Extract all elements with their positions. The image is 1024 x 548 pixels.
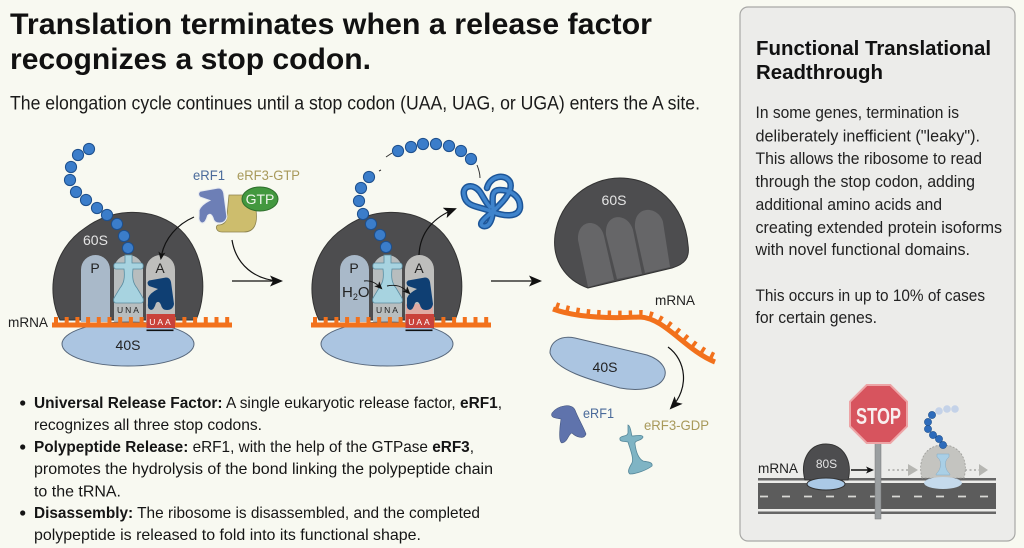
eRF3-GTP complex: GTP [246,191,274,207]
60S subunit [53,212,203,320]
sidebar statistic: This occurs in up to 10% of cases [756,287,985,305]
80S ribosome [804,444,849,490]
sidebar heading: Functional Translational [756,38,991,60]
panel: step 3 disassembly [550,178,717,474]
bullet: polypeptide release: Polypeptide Release: eRF1, with the help of the GTPase eRF3, [34,439,474,456]
eRF1 factor [193,167,227,223]
sidebar description: creating extended protein isoforms [756,219,1002,237]
panel: step 2 polypeptide release [311,138,520,366]
bullet: polypeptide release [20,439,493,500]
panel: step 1 release factor enters A site [8,143,300,366]
arrow: factors leaving [668,347,683,408]
40S subunit separated: 40S [593,359,617,375]
bullet list [20,395,502,544]
bullet: universal release factor: recognizes all three stop codons. [34,417,262,434]
sidebar statistic [756,287,985,327]
ribosome middle site with tRNA: UNA [117,305,141,315]
ribosome site A with eRF1 [146,255,175,322]
UAA stop codon: UAA [408,317,432,327]
40S subunit [321,322,453,366]
UAA stop codon: UAA [149,317,173,327]
released polypeptide chain [379,138,480,178]
eRF1 released [552,405,614,443]
mRNA strand [52,320,232,325]
60S subunit: 60S [83,232,108,248]
ghost ribosome readthrough [921,445,965,489]
mRNA strand [553,305,717,362]
40S subunit [62,322,194,366]
40S subunit: 40S [116,337,140,353]
polypeptide chain [64,143,134,254]
sidebar description: deliberately inefficient ("leaky"). [756,128,980,146]
sidebar statistic: for certain genes. [756,309,877,327]
ribosome site P with water: H [342,284,353,301]
mRNA road label: mRNA [758,460,799,476]
eRF3-GDP label: eRF3-GDP [644,417,709,433]
60S subunit [312,212,462,320]
stop sign: STOP [856,403,901,429]
UAA stop codon [406,314,434,331]
ribosome site P [81,255,110,322]
arrow: eRF1 into A site [161,217,194,258]
bullet: universal release factor: Universal Release Factor: A single eukaryotic release factor, eRF1, [34,395,502,412]
eRF3-GTP complex [216,167,300,232]
dotted arrow: continuing [965,464,988,476]
mRNA label: mRNA [8,314,49,330]
sidebar description [755,104,1002,259]
bullet: polypeptide release: promotes the hydrolysis of the bond linking the polypeptide chain [34,461,493,478]
ribosome middle site with tRNA [373,255,402,322]
sidebar heading [756,38,991,84]
sidebar heading: Readthrough [756,62,883,84]
bullet: polypeptide release: to the tRNA. [34,484,121,500]
stop sign [850,385,907,519]
60S subunit separated: 60S [602,192,626,208]
polypeptide chain in ribosome [353,171,392,253]
tRNA released [620,425,652,474]
sidebar description: additional amino acids and [756,196,942,214]
eRF3-GTP complex: eRF3-GTP [237,167,300,183]
bullet: universal release factor [20,395,502,434]
sidebar description: with novel functional domains. [755,241,970,259]
ribosome site A with eRF1: A [414,260,424,276]
arrows: hydrolysis [364,281,409,293]
title: Translation terminates when a release factor [10,8,653,41]
bullet: disassembly: polypeptide is released to fold into its functional shape. [34,527,421,544]
UAA stop codon [146,314,175,331]
mRNA strand [311,320,491,325]
ribosome site P: P [90,260,100,276]
title: recognizes a stop codon. [10,43,371,76]
arrow: peptide exit [419,209,455,255]
60S subunit separated [555,178,688,288]
eRF1 factor: eRF1 [193,167,225,183]
sidebar description: In some genes, termination is [756,104,959,122]
arrow: step 2 to step 3 [491,280,540,282]
panel: functional translational readthrough [740,7,1015,541]
arrow: ribosome to stop [851,469,872,471]
ribosome middle site with tRNA: UNA [376,305,400,315]
ribosome site A with eRF1 [405,255,434,322]
ghost chain [924,405,959,449]
ribosome site P with water [340,255,370,322]
ribosome middle site with tRNA [114,255,143,322]
subtitle: The elongation cycle continues until a stop codon (UAA, UAG, or UGA) enters the A site. [10,94,700,114]
dotted arrow: readthrough [888,464,918,476]
mRNA label: mRNA [655,292,696,308]
ribosome site P with water: O [358,284,370,301]
sidebar description: This allows the ribosome to read [756,150,982,168]
ribosome site A with eRF1: A [155,260,165,276]
40S subunit separated [550,337,665,389]
bullet: disassembly [20,505,480,544]
folded protein [464,177,520,226]
ribosome site P with water: P [349,260,359,276]
ribosome site P with water: 2 [353,292,358,302]
bullet: disassembly: Disassembly: The ribosome is disassembled, and the completed [34,505,480,522]
eRF1 released: eRF1 [583,405,614,421]
road illustration [758,478,996,514]
80S ribosome: 80S [816,457,837,471]
title [10,8,653,76]
sidebar description: through the stop codon, adding [756,173,975,191]
arrow: step 1 to step 2 [232,240,281,281]
